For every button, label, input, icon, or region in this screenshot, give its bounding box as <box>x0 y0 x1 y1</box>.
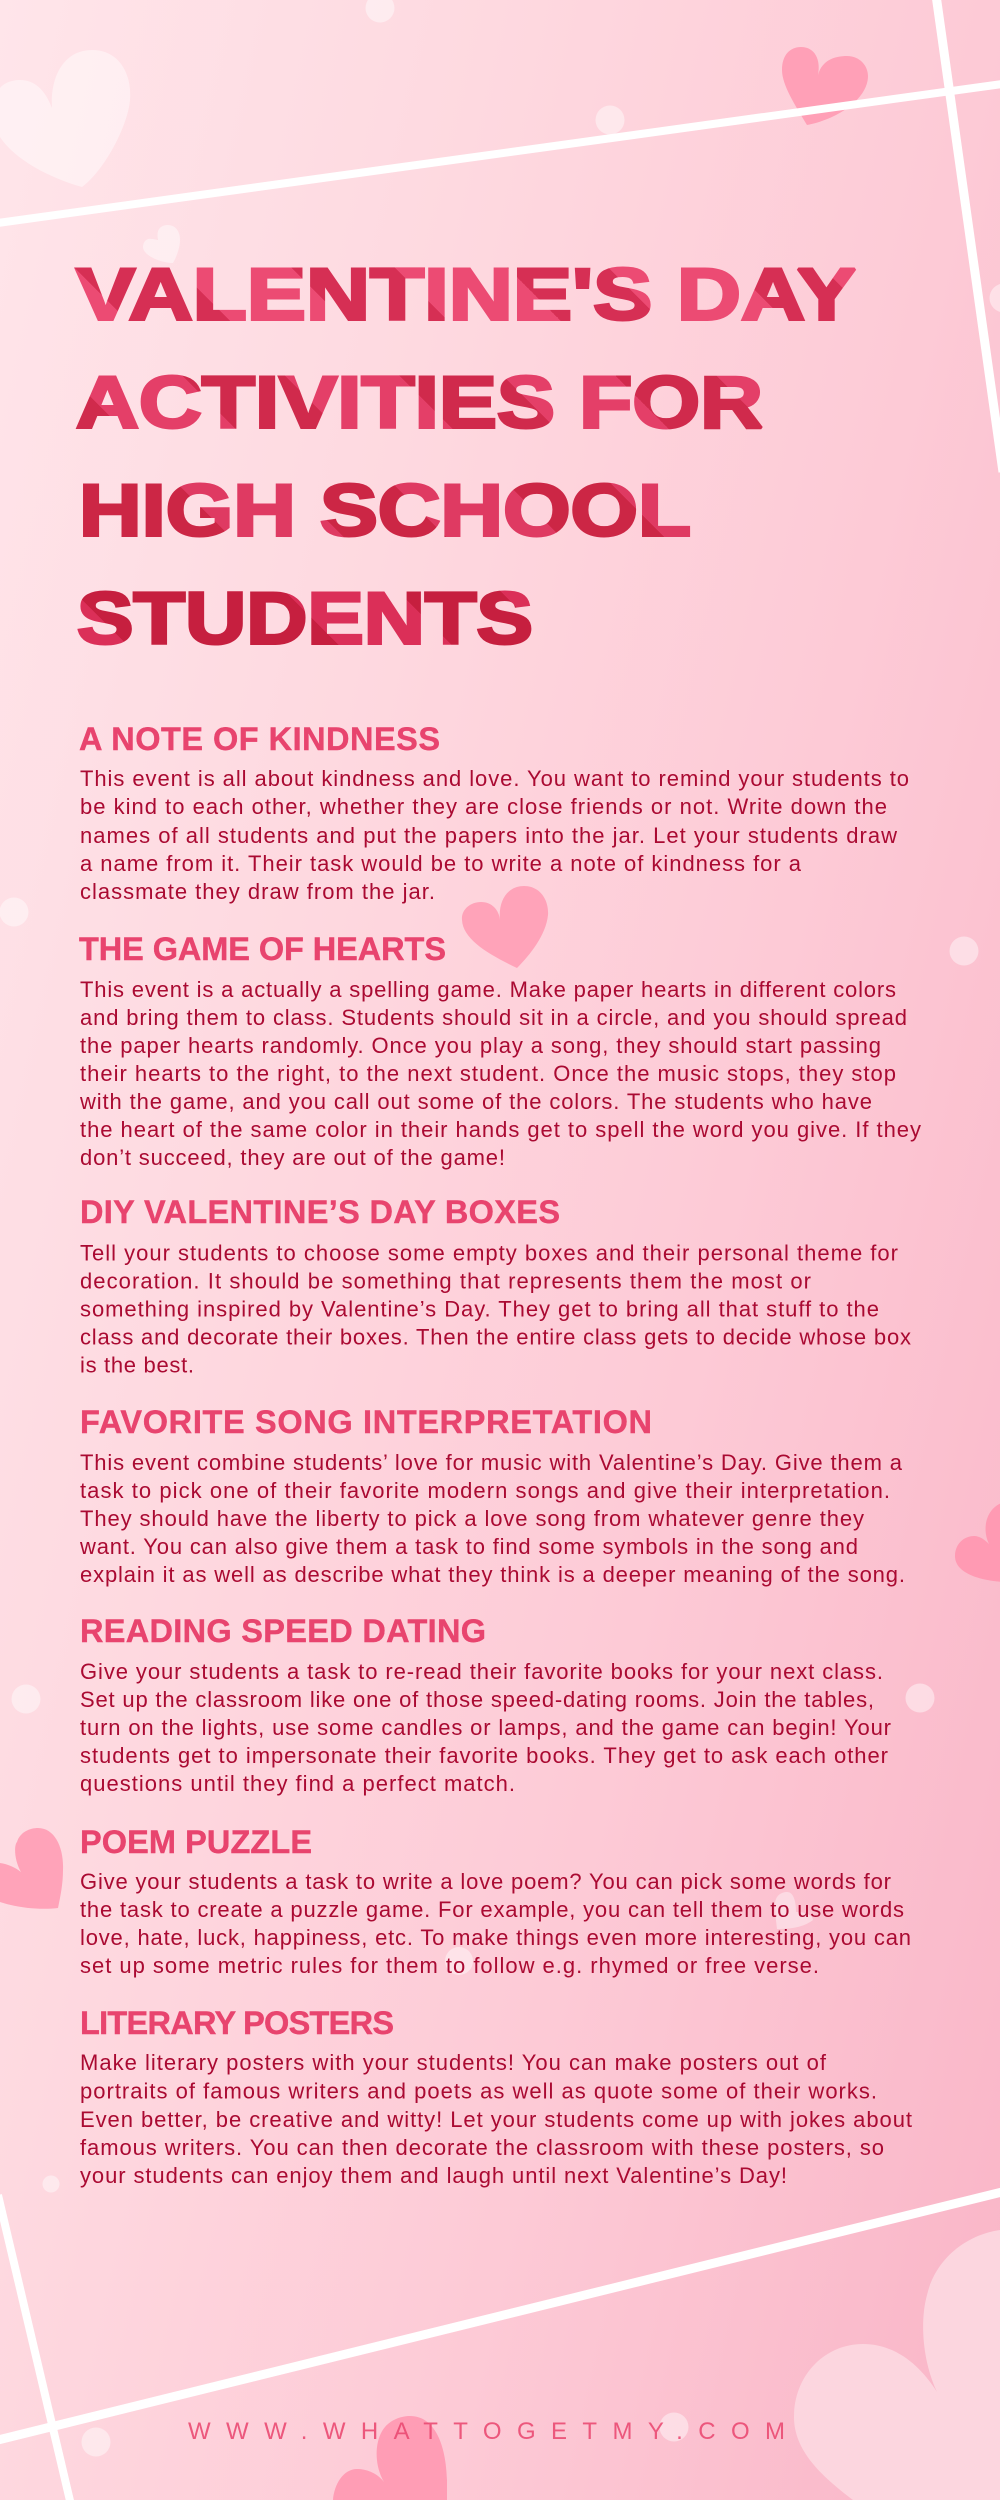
body text: Give your students a task to re-read their favorite books for your next class. <box>80 1659 883 1684</box>
body text: famous writers. You can then decorate the classroom with these posters, so <box>80 2135 884 2160</box>
body text: turn on the lights, use some candles or lamps, and the game can begin! Your <box>80 1715 891 1740</box>
heading: DIY VALENTINE’S DAY BOXES <box>80 1194 560 1230</box>
body text: Make literary posters with your students! You can make posters out of <box>80 2050 827 2075</box>
icon: pink heart top right <box>782 47 868 125</box>
heading: LITERARY POSTERS <box>80 2005 394 2041</box>
body text: classmate they draw from the jar. <box>80 879 435 904</box>
section: poem puzzle <box>80 1824 911 1978</box>
body text: class and decorate their boxes. Then the entire class gets to decide whose box <box>80 1324 911 1350</box>
body text: questions until they find a perfect match. <box>80 1771 515 1796</box>
icon: pink heart beside game of hearts <box>462 886 548 968</box>
body text <box>80 2050 912 2188</box>
icon: small pale heart above title <box>143 225 180 263</box>
body text: want. You can also give them a task to find some symbols in the song and <box>79 1534 858 1559</box>
body text: the paper hearts randomly. Once you play a song, they should start passing <box>80 1033 881 1058</box>
body text: the task to create a puzzle game. For example, you can tell them to use words <box>80 1897 904 1922</box>
body text <box>80 766 909 904</box>
title: STUDENTS <box>77 578 533 660</box>
heading: POEM PUZZLE <box>80 1824 312 1860</box>
title: HIGH SCHOOL <box>79 470 691 552</box>
title: ACTIVITIES FOR <box>76 362 763 444</box>
body text: Even better, be creative and witty! Let your students come up with jokes about <box>80 2107 912 2132</box>
heading: A NOTE OF KINDNESS <box>79 721 440 757</box>
body text: Tell your students to choose some empty boxes and their personal theme for <box>80 1240 898 1266</box>
body text: set up some metric rules for them to follow e.g. rhymed or free verse. <box>80 1953 819 1978</box>
body text: task to pick one of their favorite modern songs and give their interpretation. <box>80 1478 890 1503</box>
section: favorite song interpretation <box>79 1404 905 1587</box>
body text: and bring them to class. Students should sit in a circle, and you should spread <box>80 1005 907 1030</box>
body text: This event is a actually a spelling game. Make paper hearts in different colors <box>80 977 896 1002</box>
section: literary posters <box>80 2005 912 2188</box>
section: the game of hearts <box>79 931 921 1170</box>
section: reading speed dating <box>80 1613 891 1796</box>
body text: don’t succeed, they are out of the game! <box>80 1145 505 1170</box>
icon: pink heart bottom center <box>333 2416 447 2500</box>
section: diy valentine's day boxes <box>80 1194 911 1378</box>
footer url: WWW.WHATTOGETMY.COM <box>188 2418 785 2445</box>
body text: This event is all about kindness and love. You want to remind your students to <box>80 766 909 791</box>
body text: students get to impersonate their favorite books. They get to ask each other <box>80 1743 888 1768</box>
title: VALENTINE'S DAY <box>76 254 856 336</box>
icon: large pale heart bottom right <box>794 2230 1000 2500</box>
body text: Set up the classroom like one of those speed-dating rooms. Join the tables, <box>80 1687 874 1712</box>
icon: pale heart top left <box>0 50 130 187</box>
body text: the heart of the same color in their hands get to spell the word you give. If they <box>80 1117 921 1142</box>
body text: is the best. <box>80 1352 194 1378</box>
body text: a name from it. Their task would be to write a note of kindness for a <box>80 851 802 876</box>
body text: be kind to each other, whether they are close friends or not. Write down the <box>80 794 887 819</box>
body text: love, hate, luck, happiness, etc. To make things even more interesting, you can <box>80 1925 911 1950</box>
body text: your students can enjoy them and laugh until next Valentine’s Day! <box>80 2163 787 2188</box>
body text: Give your students a task to write a love poem? You can pick some words for <box>80 1869 891 1894</box>
heading: FAVORITE SONG INTERPRETATION <box>80 1404 652 1440</box>
body text: their hearts to the right, to the next student. Once the music stops, they stop <box>80 1061 896 1086</box>
icon: faint heart behind poem text <box>775 1892 813 1929</box>
body text: names of all students and put the papers into the jar. Let your students draw <box>80 823 897 848</box>
body text <box>80 1240 911 1378</box>
heading: THE GAME OF HEARTS <box>79 931 446 967</box>
heading: READING SPEED DATING <box>80 1613 486 1649</box>
body text <box>80 1659 891 1796</box>
body text: portraits of famous writers and poets as well as quote some of their works. <box>80 2078 877 2104</box>
icon: pink heart right edge <box>955 1502 1000 1582</box>
body text: something inspired by Valentine’s Day. They get to bring all that stuff to the <box>80 1296 879 1322</box>
section: a note of kindness <box>79 721 909 904</box>
body text <box>80 1869 911 1978</box>
body text: explain it as well as describe what they think is a deeper meaning of the song. <box>80 1562 905 1587</box>
body text <box>79 1450 905 1587</box>
icon: pink heart left edge <box>0 1828 63 1909</box>
title <box>76 254 856 660</box>
body text: They should have the liberty to pick a love song from whatever genre they <box>80 1506 864 1531</box>
body text <box>79 977 921 1170</box>
body text: with the game, and you call out some of the colors. The students who have <box>79 1089 872 1114</box>
body text: This event combine students’ love for music with Valentine’s Day. Give them a <box>80 1450 903 1475</box>
body text: decoration. It should be something that represents them the most or <box>80 1268 811 1294</box>
